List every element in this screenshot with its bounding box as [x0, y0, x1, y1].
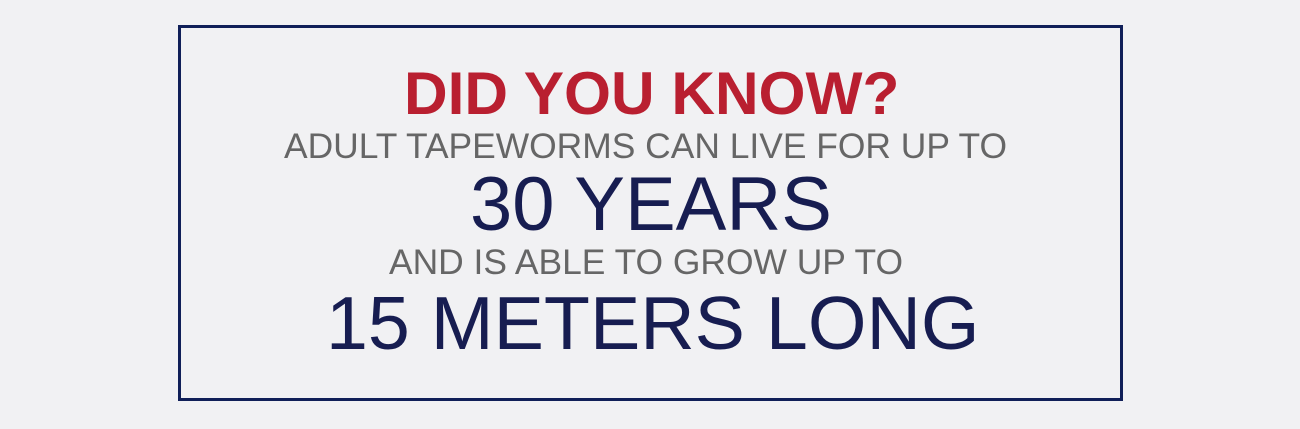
panel: did you know box	[178, 25, 1123, 401]
text: able to grow: AND IS ABLE TO GROW UP TO	[389, 242, 903, 282]
stat: 30 years: 30 YEARS	[470, 162, 832, 247]
heading: did you know: DID YOU KNOW?	[404, 59, 899, 127]
text: adult tapeworms: ADULT TAPEWORMS CAN LIVE FOR UP TO	[284, 126, 1007, 166]
stat: 15 meters long: 15 METERS LONG	[326, 281, 980, 365]
